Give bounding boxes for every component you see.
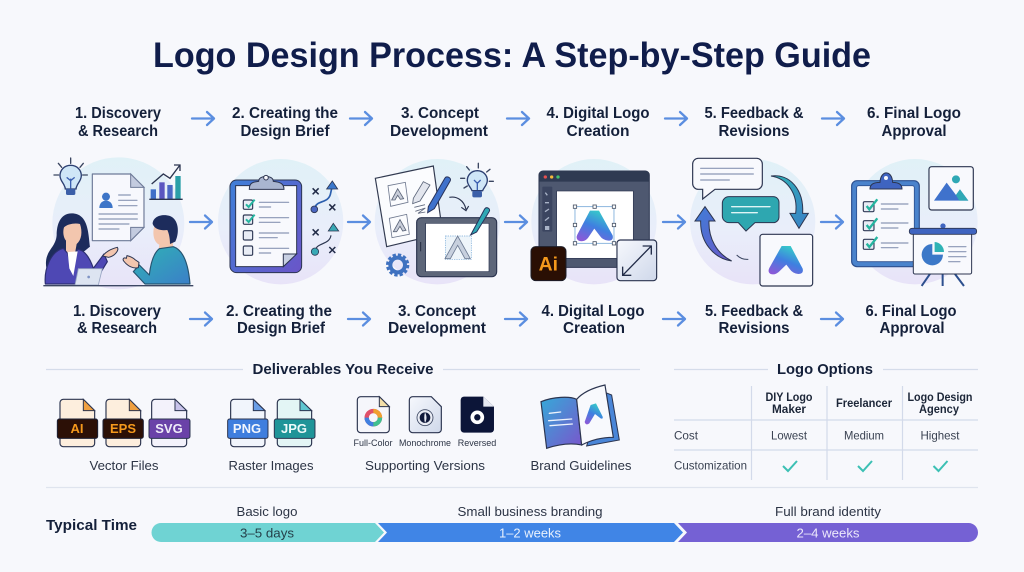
icon: final approval — [852, 159, 978, 286]
top step labels: 3. Concept — [401, 105, 479, 122]
top step labels: Approval — [882, 123, 946, 140]
table: logo options: Agency — [919, 402, 959, 416]
title: Logo Design Process: A Step-by-Step Guide — [153, 36, 871, 75]
icon: approved clipboard — [852, 173, 919, 267]
bottom arrows — [190, 312, 843, 326]
top step labels: 4. Digital Logo — [546, 105, 650, 122]
timeline — [152, 504, 978, 542]
bottom step labels: 5. Feedback & — [705, 303, 803, 320]
timeline segment: full brand identity — [678, 504, 978, 542]
supporting version icons: Full-Color — [353, 438, 393, 448]
icon: teal pencil — [470, 208, 490, 235]
supporting version icons: Reversed — [458, 438, 496, 448]
icon: teal bubble — [722, 197, 779, 231]
bottom step labels: 6. Final Logo — [866, 303, 956, 320]
timeline segment: small business branding: 1–2 weeks — [499, 526, 561, 540]
arrow: teal curved — [771, 176, 808, 228]
icon: discovery and research — [43, 157, 193, 289]
supporting version icons: Monochrome — [399, 438, 451, 448]
timeline segment: small business branding: Small business branding — [458, 504, 602, 519]
icon: bar chart — [149, 165, 183, 199]
top step labels: Creation — [566, 123, 630, 140]
table: logo options: Lowest — [771, 428, 808, 442]
top step labels: 6. Final Logo — [867, 105, 961, 122]
bottom step labels: 3. Concept — [398, 303, 476, 320]
deliverable captions: Supporting Versions — [365, 458, 486, 473]
heading: deliverables: Deliverables You Receive — [252, 361, 434, 378]
table: logo options: Freelancer — [836, 396, 892, 410]
top step labels: Development — [390, 123, 488, 140]
vector file icons: EPS — [110, 421, 136, 436]
top step labels: 2. Creating the — [232, 105, 338, 122]
icon: tablet — [417, 218, 497, 277]
icon: logo card — [760, 234, 813, 286]
supporting version icons — [353, 397, 496, 448]
icon: strategy plays — [311, 181, 339, 255]
table: logo options — [674, 386, 978, 480]
bottom step labels: 4. Digital Logo — [542, 303, 644, 320]
heading: logo options: Logo Options — [777, 361, 873, 378]
icon: light bulb — [461, 163, 493, 197]
table: logo options: Cost — [674, 428, 699, 442]
timeline segment: basic logo — [152, 504, 384, 542]
icon: concept development — [375, 159, 500, 284]
vector file icons: AI — [70, 421, 84, 436]
table: logo options: Highest — [920, 428, 960, 442]
icon: blue pencil — [428, 177, 451, 213]
table: logo options: Logo Design — [908, 390, 972, 404]
raster file icons — [228, 399, 315, 447]
bottom step labels: Creation — [563, 320, 625, 337]
table: logo options: Medium — [844, 428, 884, 442]
icon: feedback and revisions — [690, 158, 815, 286]
top step labels: & Research — [78, 123, 158, 140]
bottom step labels: Revisions — [718, 320, 790, 337]
icon: digital logo creation — [531, 159, 657, 284]
icon: picture card — [929, 167, 973, 210]
icon: clipboard checklist — [230, 175, 302, 273]
table: logo options: Maker — [772, 402, 806, 416]
raster file icons: JPG — [281, 421, 307, 436]
top arrows — [192, 112, 844, 125]
bottom step labels: 2. Creating the — [226, 303, 332, 320]
deliverable captions: Raster Images — [228, 458, 314, 473]
icon: software window — [539, 171, 649, 267]
bottom step labels: & Research — [77, 320, 157, 337]
bottom step labels: Approval — [880, 320, 944, 337]
timeline segment: full brand identity: 2–4 weeks — [796, 526, 860, 540]
bottom step labels: 1. Discovery — [73, 303, 161, 320]
table: logo options: DIY Logo — [766, 390, 812, 404]
icon: comment bubble — [693, 158, 762, 199]
illustration: man — [123, 215, 190, 284]
top step labels: 5. Feedback & — [704, 105, 804, 122]
icon: light bulb — [54, 158, 87, 195]
icon: document — [92, 174, 144, 241]
vector file icons: SVG — [155, 421, 183, 436]
icon: scale box — [617, 240, 657, 281]
deliverable captions: Vector Files — [90, 458, 159, 473]
timeline segment: small business branding — [378, 504, 683, 542]
raster file icons: PNG — [233, 421, 261, 436]
deliverable captions — [90, 458, 632, 473]
arrow: purple curved — [695, 207, 732, 261]
illustration: woman with laptop — [45, 213, 118, 285]
bottom step labels: Development — [388, 320, 486, 337]
bottom step labels: Design Brief — [237, 320, 326, 337]
middle arrows — [190, 216, 843, 228]
top step labels: Revisions — [718, 123, 790, 140]
top step labels: Design Brief — [240, 123, 330, 140]
icon: design brief — [218, 159, 343, 284]
top step labels — [75, 105, 961, 140]
table: logo options: Customization — [674, 458, 747, 472]
timeline segment: basic logo: Basic logo — [236, 504, 298, 519]
timeline segment: full brand identity: Full brand identity — [775, 504, 882, 519]
bottom step labels — [73, 303, 956, 337]
icon: gear — [387, 255, 408, 275]
typical time label: Typical Time — [46, 517, 137, 534]
vector file icons — [57, 399, 190, 447]
icon: presentation board — [909, 223, 977, 286]
top step labels: 1. Discovery — [75, 105, 161, 122]
icon: brand guidelines book — [541, 385, 619, 448]
deliverable captions: Brand Guidelines — [530, 458, 632, 473]
icon: Adobe Illustrator badge: Ai — [539, 255, 558, 276]
icon: sketch paper — [375, 166, 443, 247]
timeline segment: basic logo: 3–5 days — [240, 526, 295, 540]
icon: logo with selection handles — [573, 205, 616, 245]
